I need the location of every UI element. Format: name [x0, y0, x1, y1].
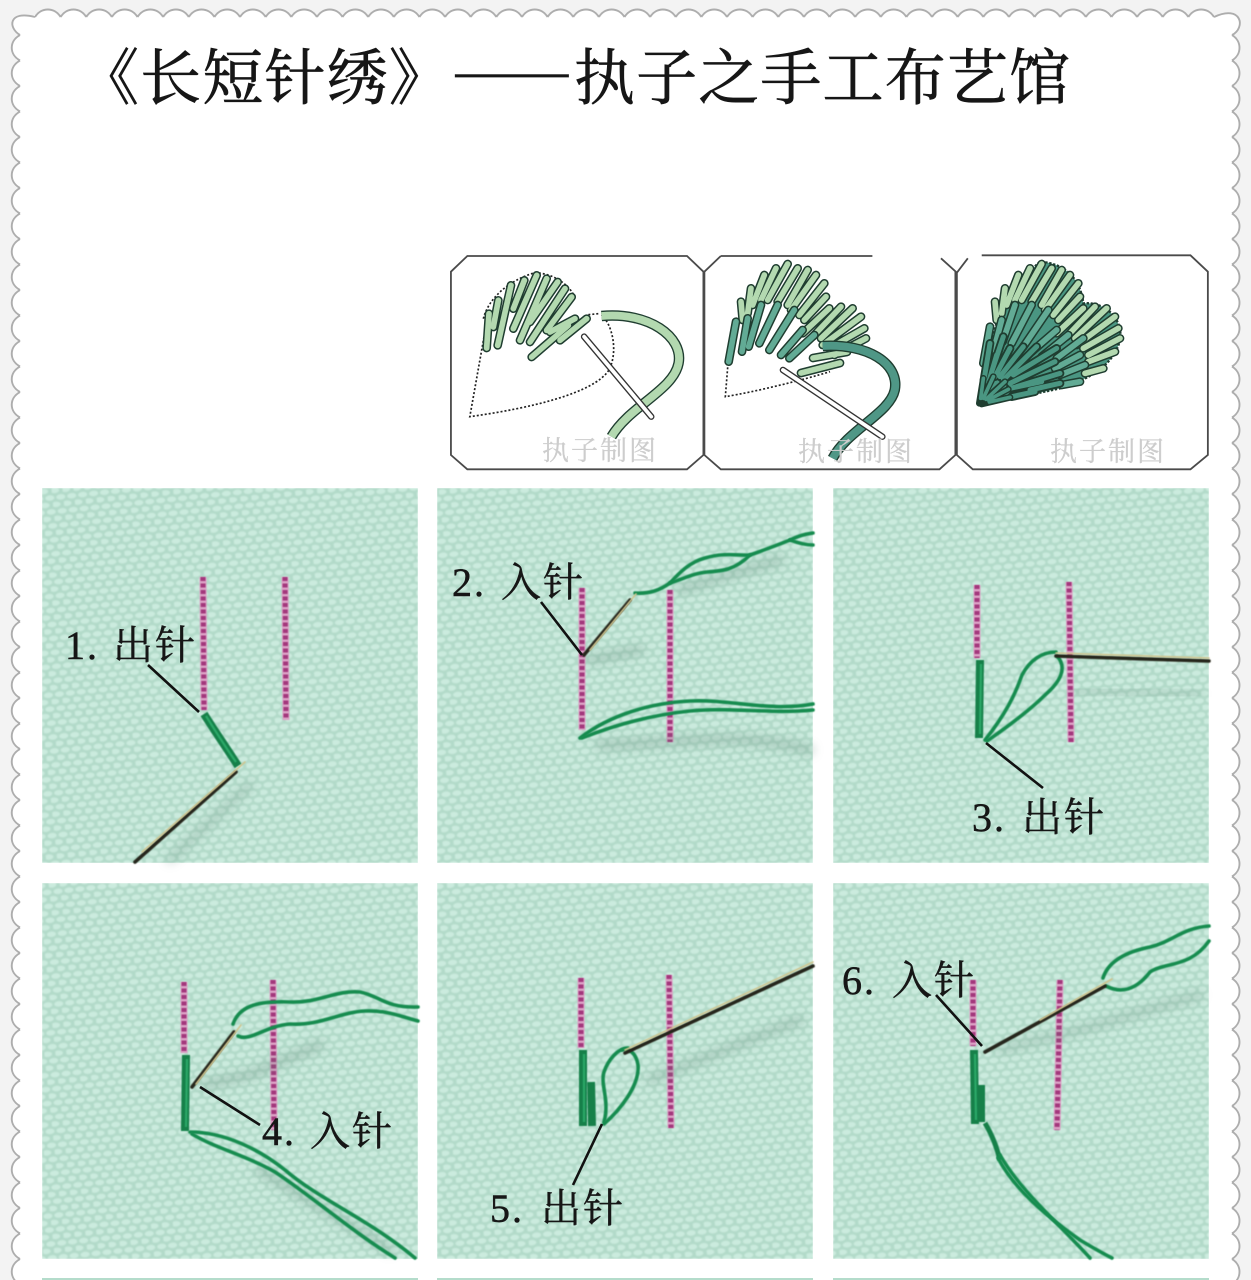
label 6 [842, 958, 982, 1046]
guide lines 6 [973, 980, 1060, 1130]
thread 1 [204, 714, 238, 766]
label 3: 3. [972, 795, 1006, 840]
label 4: 入针 [310, 1109, 394, 1154]
diagram panel: finished leaf [941, 255, 1208, 469]
needle shadow 3 [1075, 690, 1200, 695]
label 2: 2. [452, 560, 486, 605]
thread 1 [602, 316, 679, 437]
stitches 5 [583, 1050, 592, 1126]
stitch 4 [185, 1055, 187, 1131]
lower thread 4 [190, 1132, 415, 1258]
needle 1 [135, 762, 245, 862]
frame 1 [451, 256, 703, 469]
label 5: 5. [490, 1186, 524, 1231]
guide lines 2 [582, 588, 670, 742]
needle 6 [985, 979, 1112, 1052]
diagram panel: first stitches [451, 256, 703, 469]
needle shadow 6 [1000, 995, 1200, 1050]
edge dots 3 [980, 262, 1120, 404]
watermark 1: 执子制图 [542, 429, 658, 468]
watermark 3: 执子制图 [1050, 430, 1166, 469]
thread loop 5 [603, 1048, 638, 1124]
needle 2 [584, 594, 636, 655]
photo panel 3 [833, 488, 1209, 863]
needle shadow 1 [170, 785, 250, 860]
photo panel 6 [833, 883, 1209, 1259]
leaf outline 2 [725, 363, 830, 397]
upper thread 2 [635, 533, 813, 593]
title: 《长短针绣》——执子之手工布艺馆 [78, 30, 1070, 117]
stitches 1 [483, 273, 598, 357]
label 6: 入针 [892, 958, 976, 1003]
needle 3 [1056, 653, 1209, 661]
label 2 [452, 560, 585, 655]
frame 2 [704, 256, 955, 469]
leaf outline 1 [470, 313, 614, 417]
guide lines 5 [581, 975, 671, 1128]
label 3 [972, 743, 1106, 840]
label 5 [490, 1124, 625, 1231]
photo panel 5 [437, 883, 813, 1259]
photo panel 4 [42, 883, 418, 1259]
needle 5 [625, 962, 813, 1053]
frame 3 [941, 255, 1208, 469]
photo panel 2 [437, 488, 813, 863]
stitches 6 [974, 1050, 981, 1124]
next row panels, cut off [42, 1278, 1209, 1280]
label 1 [65, 623, 199, 712]
lower thread 2 [580, 701, 813, 738]
needle 1 [584, 337, 651, 417]
label 1: 1. [65, 623, 99, 668]
stitch 3 [979, 660, 981, 738]
label 4 [200, 1087, 394, 1154]
thread shadow 2 [590, 560, 810, 750]
needle shadow 5 [650, 1020, 800, 1080]
photo panel 1 [42, 488, 418, 863]
guide lines 1 [203, 577, 286, 720]
thread loop 3 [985, 652, 1062, 741]
lower thread 6 [985, 1123, 1112, 1258]
label 6: 6. [842, 958, 876, 1003]
watermark 2: 执子制图 [798, 430, 914, 469]
leaf 2 [725, 264, 866, 397]
needle 4 [192, 1025, 241, 1087]
shadows 4 [205, 1045, 390, 1250]
needle 2 [783, 370, 882, 437]
label 5: 出针 [541, 1186, 625, 1231]
leaf 3 [979, 262, 1120, 404]
label 2: 入针 [501, 560, 585, 605]
guide lines 3 [977, 582, 1071, 742]
guide lines 4 [184, 980, 274, 1130]
label 1: 出针 [113, 623, 197, 668]
label 3: 出针 [1022, 795, 1106, 840]
upper thread 4 [233, 992, 418, 1037]
thread 2 [823, 346, 895, 458]
diagram panel: second row of stitches [704, 256, 955, 469]
upper thread 6 [1103, 926, 1209, 990]
label 4: 4. [262, 1109, 296, 1154]
